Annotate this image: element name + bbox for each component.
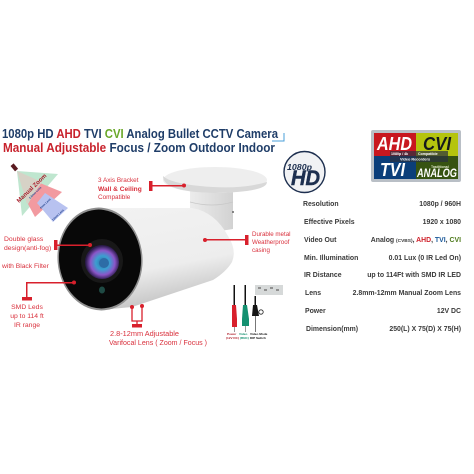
icon: manual zoom diagram: 2.8mm Lens (28, 185, 43, 200)
row: video out: Video Out (304, 237, 337, 244)
row: min illumination (304, 255, 461, 262)
callout: SMD LEDs: IR range (14, 322, 40, 329)
row: resolution: Resolution (303, 201, 339, 208)
callout: metal casing: Weatherproof (252, 239, 290, 246)
callout: varifocal lens: Varifocal Lens ( Zoom / Focus ) (109, 340, 207, 347)
icon: manual zoom diagram: 12mm Lens (51, 208, 65, 222)
row: lens: 2.8mm-12mm Manual Zoom Lens (353, 290, 461, 297)
row: effective pixels (304, 219, 461, 226)
icon: cable connectors (226, 285, 283, 340)
icon: 1080p HD badge: HD (291, 167, 320, 190)
row: resolution: 1080p / 960H (419, 201, 461, 208)
row: IR distance (304, 272, 461, 279)
row: video out: Analog (CVBS), AHD, TVI, CVI (371, 237, 461, 244)
connector labels: (BNC) (240, 336, 249, 340)
title (2, 126, 279, 155)
row: power (305, 308, 461, 315)
camera lens (85, 245, 119, 279)
logo: AHD CVI TVI Analog (371, 130, 461, 182)
connector labels (226, 332, 268, 340)
row: effective pixels: 1920 x 1080 (423, 219, 461, 226)
row: power: Power (305, 308, 326, 315)
callout: bracket: Wall & Ceiling (98, 186, 142, 193)
callout: metal casing (203, 231, 291, 254)
callout: SMD LEDs: up to 114 ft (10, 313, 44, 320)
icon: manual zoom diagram (11, 163, 68, 222)
icon: manual zoom diagram: 6mm Lens (39, 197, 52, 210)
title line 2: Manual Adjustable Focus / Zoom Outdoor Indoor (3, 140, 275, 155)
callout: metal casing: Durable metal (252, 231, 291, 238)
logo: AHD CVI TVI Analog: ANALOG (416, 168, 457, 180)
camera body (53, 204, 234, 314)
camera bracket (163, 167, 267, 232)
DIP switch (255, 285, 283, 295)
row: IR distance: up to 114Ft with SMD IR LED (367, 272, 461, 279)
connector labels: (12V DC) (226, 336, 239, 340)
logo: AHD CVI TVI Analog: TVI (380, 160, 406, 180)
icon: manual zoom diagram: Manual Zoom (16, 173, 48, 204)
callout: double glass: Double glass (4, 236, 44, 243)
row: min illumination: Min. Illumination (304, 255, 358, 262)
callout: SMD LEDs: SMD Leds (11, 304, 43, 311)
spec table (303, 201, 461, 333)
row: dimension: 250(L) X 75(D) X 75(H) (389, 326, 461, 333)
red power plug (232, 285, 237, 332)
logo: AHD CVI TVI Analog: AHD (376, 134, 412, 154)
camera front ring (53, 204, 147, 314)
connector labels: Video Mode (250, 332, 268, 336)
logo: AHD CVI TVI Analog: Video Recorders (400, 158, 430, 162)
callout: bracket: 3 Axis Bracket (98, 177, 139, 184)
connector labels: Power (227, 332, 237, 336)
row: resolution (303, 201, 461, 208)
callout: varifocal lens (109, 304, 207, 347)
row: IR distance: IR Distance (304, 272, 342, 279)
logo: AHD CVI TVI Analog: Compatible (418, 152, 438, 156)
callout: double glass: design(anti-fog) (4, 245, 51, 252)
row: effective pixels: Effective Pixels (304, 219, 355, 226)
logo: AHD CVI TVI Analog: 1080p / 4k (391, 152, 408, 156)
callout: black filter: with Black Filter (1, 263, 50, 270)
row: min illumination: 0.01 Lux (0 IR Led On) (389, 255, 461, 262)
connector labels: Video (239, 332, 247, 336)
row: video out (304, 237, 461, 244)
callout: SMD LEDs (10, 280, 76, 329)
row: dimension (306, 326, 461, 333)
icon: 1080p HD badge (284, 152, 325, 192)
row: dimension: Dimension(mm) (306, 326, 358, 333)
title corner accent (272, 133, 284, 141)
black switch plug (252, 296, 263, 332)
icon: 1080p HD badge: 1080p (287, 162, 312, 172)
callout: double glass (4, 236, 92, 252)
callout: bracket: Compatible (98, 194, 131, 201)
green video plug (242, 285, 249, 332)
connector labels: DIP Switch (250, 336, 266, 340)
infrared LED (99, 286, 105, 294)
row: lens (305, 290, 461, 297)
callout: metal casing: casing (252, 247, 270, 254)
row: lens: Lens (305, 290, 321, 297)
title line 1: 1080p HD AHD TVI CVI Analog Bullet CCTV Camera (2, 126, 279, 141)
callout: varifocal lens: 2.8-12mm Adjustable (110, 331, 179, 338)
logo: AHD CVI TVI Analog: Traditional (431, 165, 449, 169)
logo: AHD CVI TVI Analog: CVI (423, 134, 452, 154)
row: power: 12V DC (437, 308, 461, 315)
callout: bracket (98, 177, 186, 201)
